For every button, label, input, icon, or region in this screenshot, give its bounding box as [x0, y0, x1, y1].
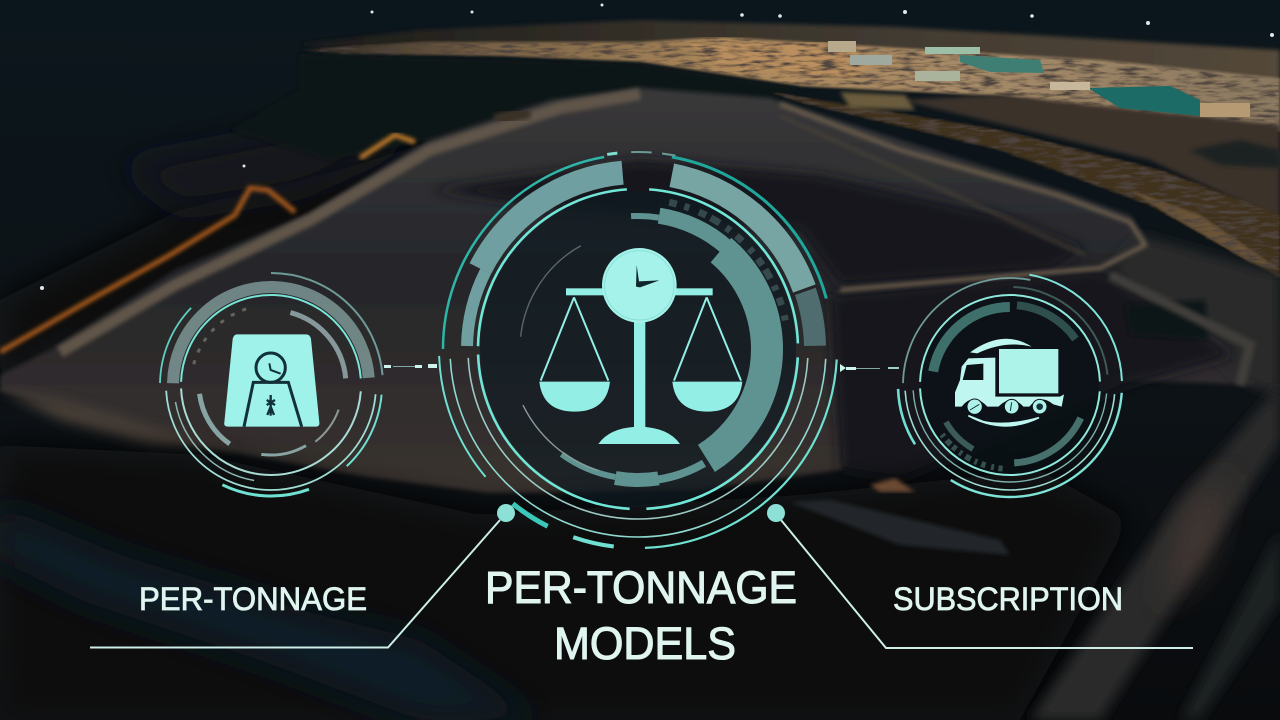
left gauge rings [129, 243, 413, 527]
panel: left per-tonnage gauge [129, 243, 413, 527]
icon: delivery truck [955, 339, 1064, 426]
dark berm under plateau [230, 54, 800, 160]
brown slope on the right [770, 92, 1280, 278]
gauge outer rings [358, 69, 918, 629]
callout line: subscription [767, 504, 1193, 648]
lit plateau [300, 37, 1280, 132]
title: per-tonnage models: MODELS [554, 618, 736, 669]
label: subscription: SUBSCRIPTION [893, 581, 1123, 617]
back wall of the site [300, 20, 1280, 82]
site buildings [925, 47, 980, 54]
brown lump lower left [0, 390, 240, 450]
right road [1030, 385, 1280, 720]
callout line: per-tonnage [90, 504, 515, 648]
title: per-tonnage models: PER-TONNAGE [485, 562, 797, 613]
connector: centre to right circle [840, 364, 899, 372]
site lights [40, 4, 1274, 290]
right gauge rings [856, 231, 1164, 539]
icon: weighing scale block [224, 334, 319, 427]
panel: central gauge [358, 69, 918, 629]
orange lit road [0, 188, 295, 352]
gauge inner grey band [456, 167, 820, 531]
panel: right subscription gauge [856, 231, 1164, 539]
label: per-tonnage: PER-TONNAGE [139, 581, 367, 617]
title: per-tonnage models [485, 562, 797, 669]
lower dark ground [0, 445, 1130, 720]
gauge thick bands [400, 111, 876, 587]
icon: balance scale with clock [539, 248, 742, 444]
tan road edges [60, 94, 640, 352]
connector: left circle to centre [384, 364, 437, 368]
dark hollows on pad [430, 160, 1085, 285]
gauge inner ring [467, 178, 809, 520]
blue diagonal band [0, 505, 540, 720]
grey ground pad [0, 88, 1255, 493]
